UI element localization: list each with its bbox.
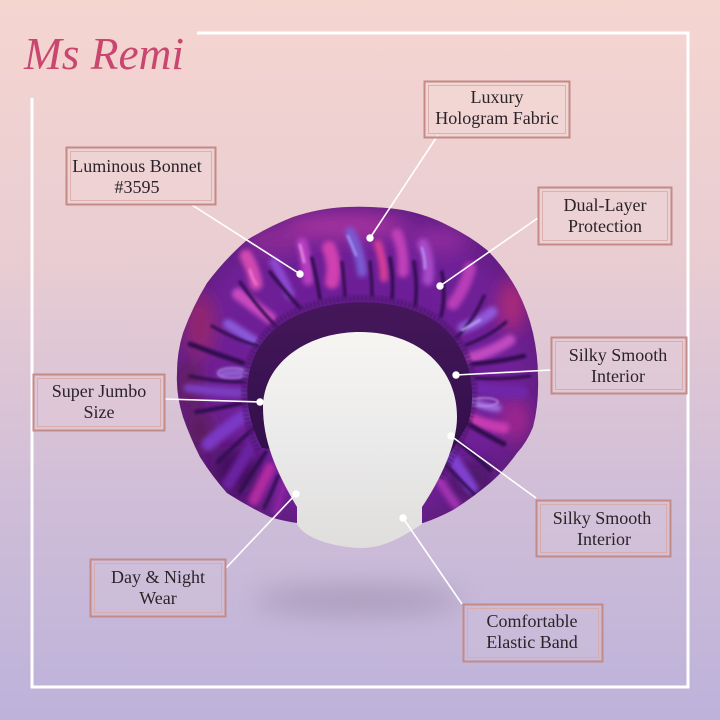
callout: Comfortable Elastic Band	[464, 604, 602, 662]
colour patches	[179, 212, 530, 500]
callout: Silky Smooth Interior (upper): Interior	[591, 366, 645, 386]
callout: Luxury Hologram Fabric: Hologram Fabric	[435, 108, 559, 128]
callout: Super Jumbo Size: Size	[84, 402, 115, 422]
callout: Silky Smooth Interior (lower): Interior	[577, 529, 631, 549]
callout: Super Jumbo Size	[34, 374, 164, 430]
callout: Dual-Layer Protection: Protection	[568, 216, 642, 236]
callout: Luminous Bonnet #3595: Luminous Bonnet	[72, 156, 202, 176]
mannequin head	[263, 332, 457, 548]
callout: Luxury Hologram Fabric: Luxury	[470, 87, 524, 107]
callout: Silky Smooth Interior (lower)	[536, 500, 670, 556]
satin band	[247, 302, 472, 470]
callout: Super Jumbo Size: Super Jumbo	[52, 381, 146, 401]
callout: Day & Night Wear: Wear	[139, 588, 177, 608]
callout: Comfortable Elastic Band: Elastic Band	[486, 632, 578, 652]
callout: Silky Smooth Interior (upper): Silky Smooth	[569, 345, 667, 365]
callout: Luxury Hologram Fabric	[424, 82, 570, 138]
callout: Dual-Layer Protection	[538, 188, 672, 244]
logo: Ms Remi: Ms Remi	[23, 28, 184, 79]
wide soft folds	[188, 232, 522, 512]
small highlights	[218, 236, 498, 406]
callout: Day & Night Wear: Day & Night	[111, 567, 205, 587]
callout: Silky Smooth Interior (lower): Silky Smooth	[553, 508, 651, 528]
ruffle puckers	[245, 298, 474, 478]
bonnet illustration	[170, 200, 545, 548]
bonnet fabric	[170, 200, 545, 530]
callout: Luminous Bonnet #3595: #3595	[114, 177, 160, 197]
callout: Dual-Layer Protection: Dual-Layer	[564, 195, 646, 215]
callout lines and dots	[165, 135, 551, 604]
dark creases	[190, 258, 530, 508]
callout: Day & Night Wear	[90, 560, 226, 616]
callout: Luminous Bonnet #3595	[66, 148, 216, 204]
mannequin shadow	[253, 585, 463, 615]
callout: Silky Smooth Interior (upper)	[552, 338, 686, 394]
callout: Comfortable Elastic Band: Comfortable	[487, 611, 577, 631]
